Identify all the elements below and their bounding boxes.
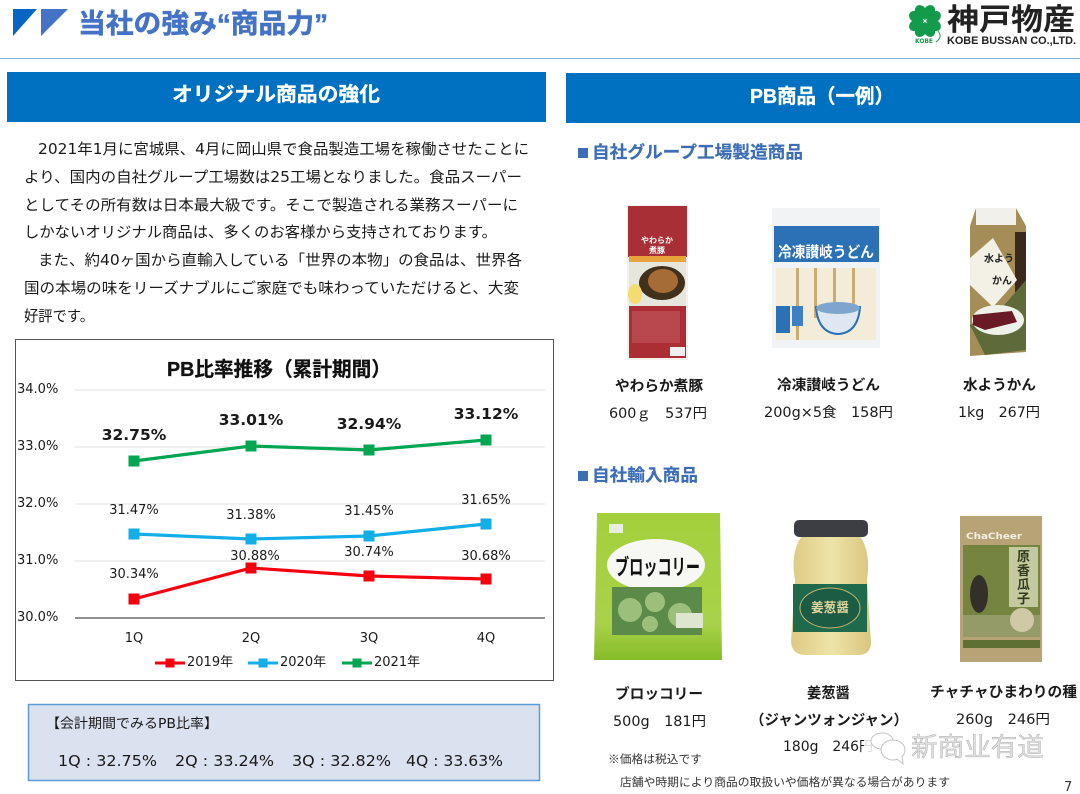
y axis labels: 31.0% [17,553,58,568]
series: 2019: 30.68% [461,549,511,564]
panel: PB products [566,73,1080,794]
watermark [864,732,1044,764]
product label: jiangcong sauce: 180g 246円 [783,739,873,755]
heading: original products: オリジナル商品の強化 [172,83,380,106]
logo: Kobe Bussan: 神戸物産 [947,4,1075,37]
chart title: PB比率推移（累計期間） [167,358,391,381]
series: 2019: 30.88% [230,549,280,564]
subheading: group factory products: 自社グループ工場製造商品 [592,142,803,162]
product image: pork pack: 煮豚 [649,245,665,255]
x axis labels: 2Q [242,631,260,646]
series: 2019 [109,545,511,604]
text block: body copy: 国の本場の味をリーズナブルにご家庭でも味わっていただけると、大変 [24,279,519,297]
icon: chat bubbles [871,733,905,764]
header band [0,4,1080,59]
footnote: availability: 店舗や時期により商品の取扱いや価格が異なる場合があります [620,775,950,789]
callout: fiscal period ratios: 3Q : 32.82% [292,752,391,770]
product image: sunflower seeds bag: 瓜 [1017,577,1030,592]
product image: sunflower seeds bag: ChaCheer [966,532,1023,542]
product image: sunflower seeds bag [960,516,1042,662]
panel: original products [7,72,554,780]
product image: udon [772,208,880,348]
callout: fiscal period ratios: 4Q : 33.63% [406,752,503,770]
x axis labels: 1Q [125,631,143,646]
x axis labels: 4Q [477,631,495,646]
series: 2019: 30.34% [109,567,159,582]
y axis labels: 33.0% [17,439,58,454]
series: 2020: 31.47% [109,503,159,518]
product label: sunflower seeds: チャチャひまわりの種 [930,684,1077,701]
heading: original products [7,72,546,122]
title: 当社の強み“商品力” [78,9,328,39]
series: 2020 [109,493,511,544]
logo: Kobe Bussan: KOBE BUSSAN CO.,LTD. [947,35,1076,47]
product image: ginger scallion jar: 姜葱醤 [811,600,849,615]
series: 2021: 33.01% [219,411,284,429]
product label: broccoli [613,685,706,730]
product label: yawaraka nibuta: やわらか煮豚 [615,378,704,395]
product label: sanuki udon: 冷凍讃岐うどん [777,377,880,394]
product label: sunflower seeds: 260g 246円 [956,712,1050,728]
x axis labels [125,631,495,646]
product image: udon: 冷凍讃岐うどん [778,244,874,261]
text block: body copy: また、約40ヶ国から直輸入している「世界の本物」の食品は、世界各 [38,251,522,269]
product label: broccoli: ブロッコリー [615,685,703,703]
product image: mizu yokan carton: 水よう [984,252,1014,265]
text block: body copy: 2021年1月に宮城県、4月に岡山県で食品製造工場を稼働させたことに [38,140,529,158]
product label: sanuki udon: 200g×5食 158円 [764,405,893,421]
legend: 2021年 [374,655,420,670]
logo: Kobe Bussan [909,4,1076,47]
logo: Kobe Bussan: KOBE [915,38,933,45]
text block: body copy: 好評です。 [24,307,94,325]
product label: sanuki udon [764,377,893,421]
subheading: imported products: 自社輸入商品 [592,465,698,485]
text block: body copy [24,140,529,325]
product label: mizu yokan: 1kg 267円 [958,405,1040,421]
product label: jiangcong sauce: 姜葱醤 [807,685,850,702]
text block: body copy: としてその所有数は日本最大級です。そこで製造される業務スーパーに [24,196,518,214]
heading: PB products [566,73,1080,123]
product image: broccoli: ブロッコリー [615,555,700,580]
heading: PB products: PB商品（一例） [750,85,894,108]
product image: broccoli [594,513,722,660]
product image: pork pack: やわらか [641,235,673,245]
text block: body copy: しかないオリジナル商品は、多くのお客様から支持されております。 [24,223,497,241]
footnote: tax: ※価格は税込です [608,752,702,766]
series: 2019: 30.74% [344,545,394,560]
y axis labels: 34.0% [17,382,58,397]
x axis labels: 3Q [360,631,378,646]
product image: sunflower seeds bag: 香 [1017,563,1030,578]
series: 2020: 31.38% [226,508,276,523]
watermark: 新商业有道 [911,732,1044,762]
product image: sunflower seeds bag: 原 [1017,549,1030,564]
series: 2020: 31.65% [461,493,511,508]
product label: yawaraka nibuta [609,378,707,422]
product label: mizu yokan: 水ようかん [963,377,1036,394]
product label: sunflower seeds [930,684,1077,728]
series: 2021: 32.75% [102,426,167,444]
y axis labels: 30.0% [17,610,58,625]
series: 2021 [102,405,519,466]
legend: 2020年 [280,655,326,670]
product label: broccoli: 500g 181円 [613,714,706,730]
product label: jiangcong sauce [750,685,908,755]
callout: fiscal period ratios: 2Q : 33.24% [175,752,274,770]
product image: ginger scallion jar [791,520,871,655]
callout: fiscal period ratios: 【会計期間でみるPB比率】 [46,716,218,732]
series: 2021: 33.12% [454,405,519,423]
product label: jiangcong sauce: （ジャンツォンジャン） [750,712,908,729]
series: 2020: 31.45% [344,504,394,519]
y axis labels [17,382,58,625]
line chart: PB ratio [16,340,554,680]
legend: 2019年 [187,655,233,670]
product label: mizu yokan [958,377,1040,421]
legend [155,655,420,670]
callout: fiscal period ratios: 1Q : 32.75% [58,752,157,770]
product label: yawaraka nibuta: 600ｇ 537円 [609,406,707,422]
product image: pork pack [627,205,688,360]
product image: sunflower seeds bag: 子 [1017,591,1030,606]
product image: mizu yokan carton: かん [992,275,1012,287]
icon: title chevrons [13,9,68,36]
product image: mizu yokan carton [970,208,1026,356]
text block: body copy: より、国内の自社グループ工場数は25工場となりました。食品スーパー [24,168,522,186]
callout: fiscal period ratios [28,704,540,780]
series: 2021: 32.94% [337,415,402,433]
y axis labels: 32.0% [17,496,58,511]
